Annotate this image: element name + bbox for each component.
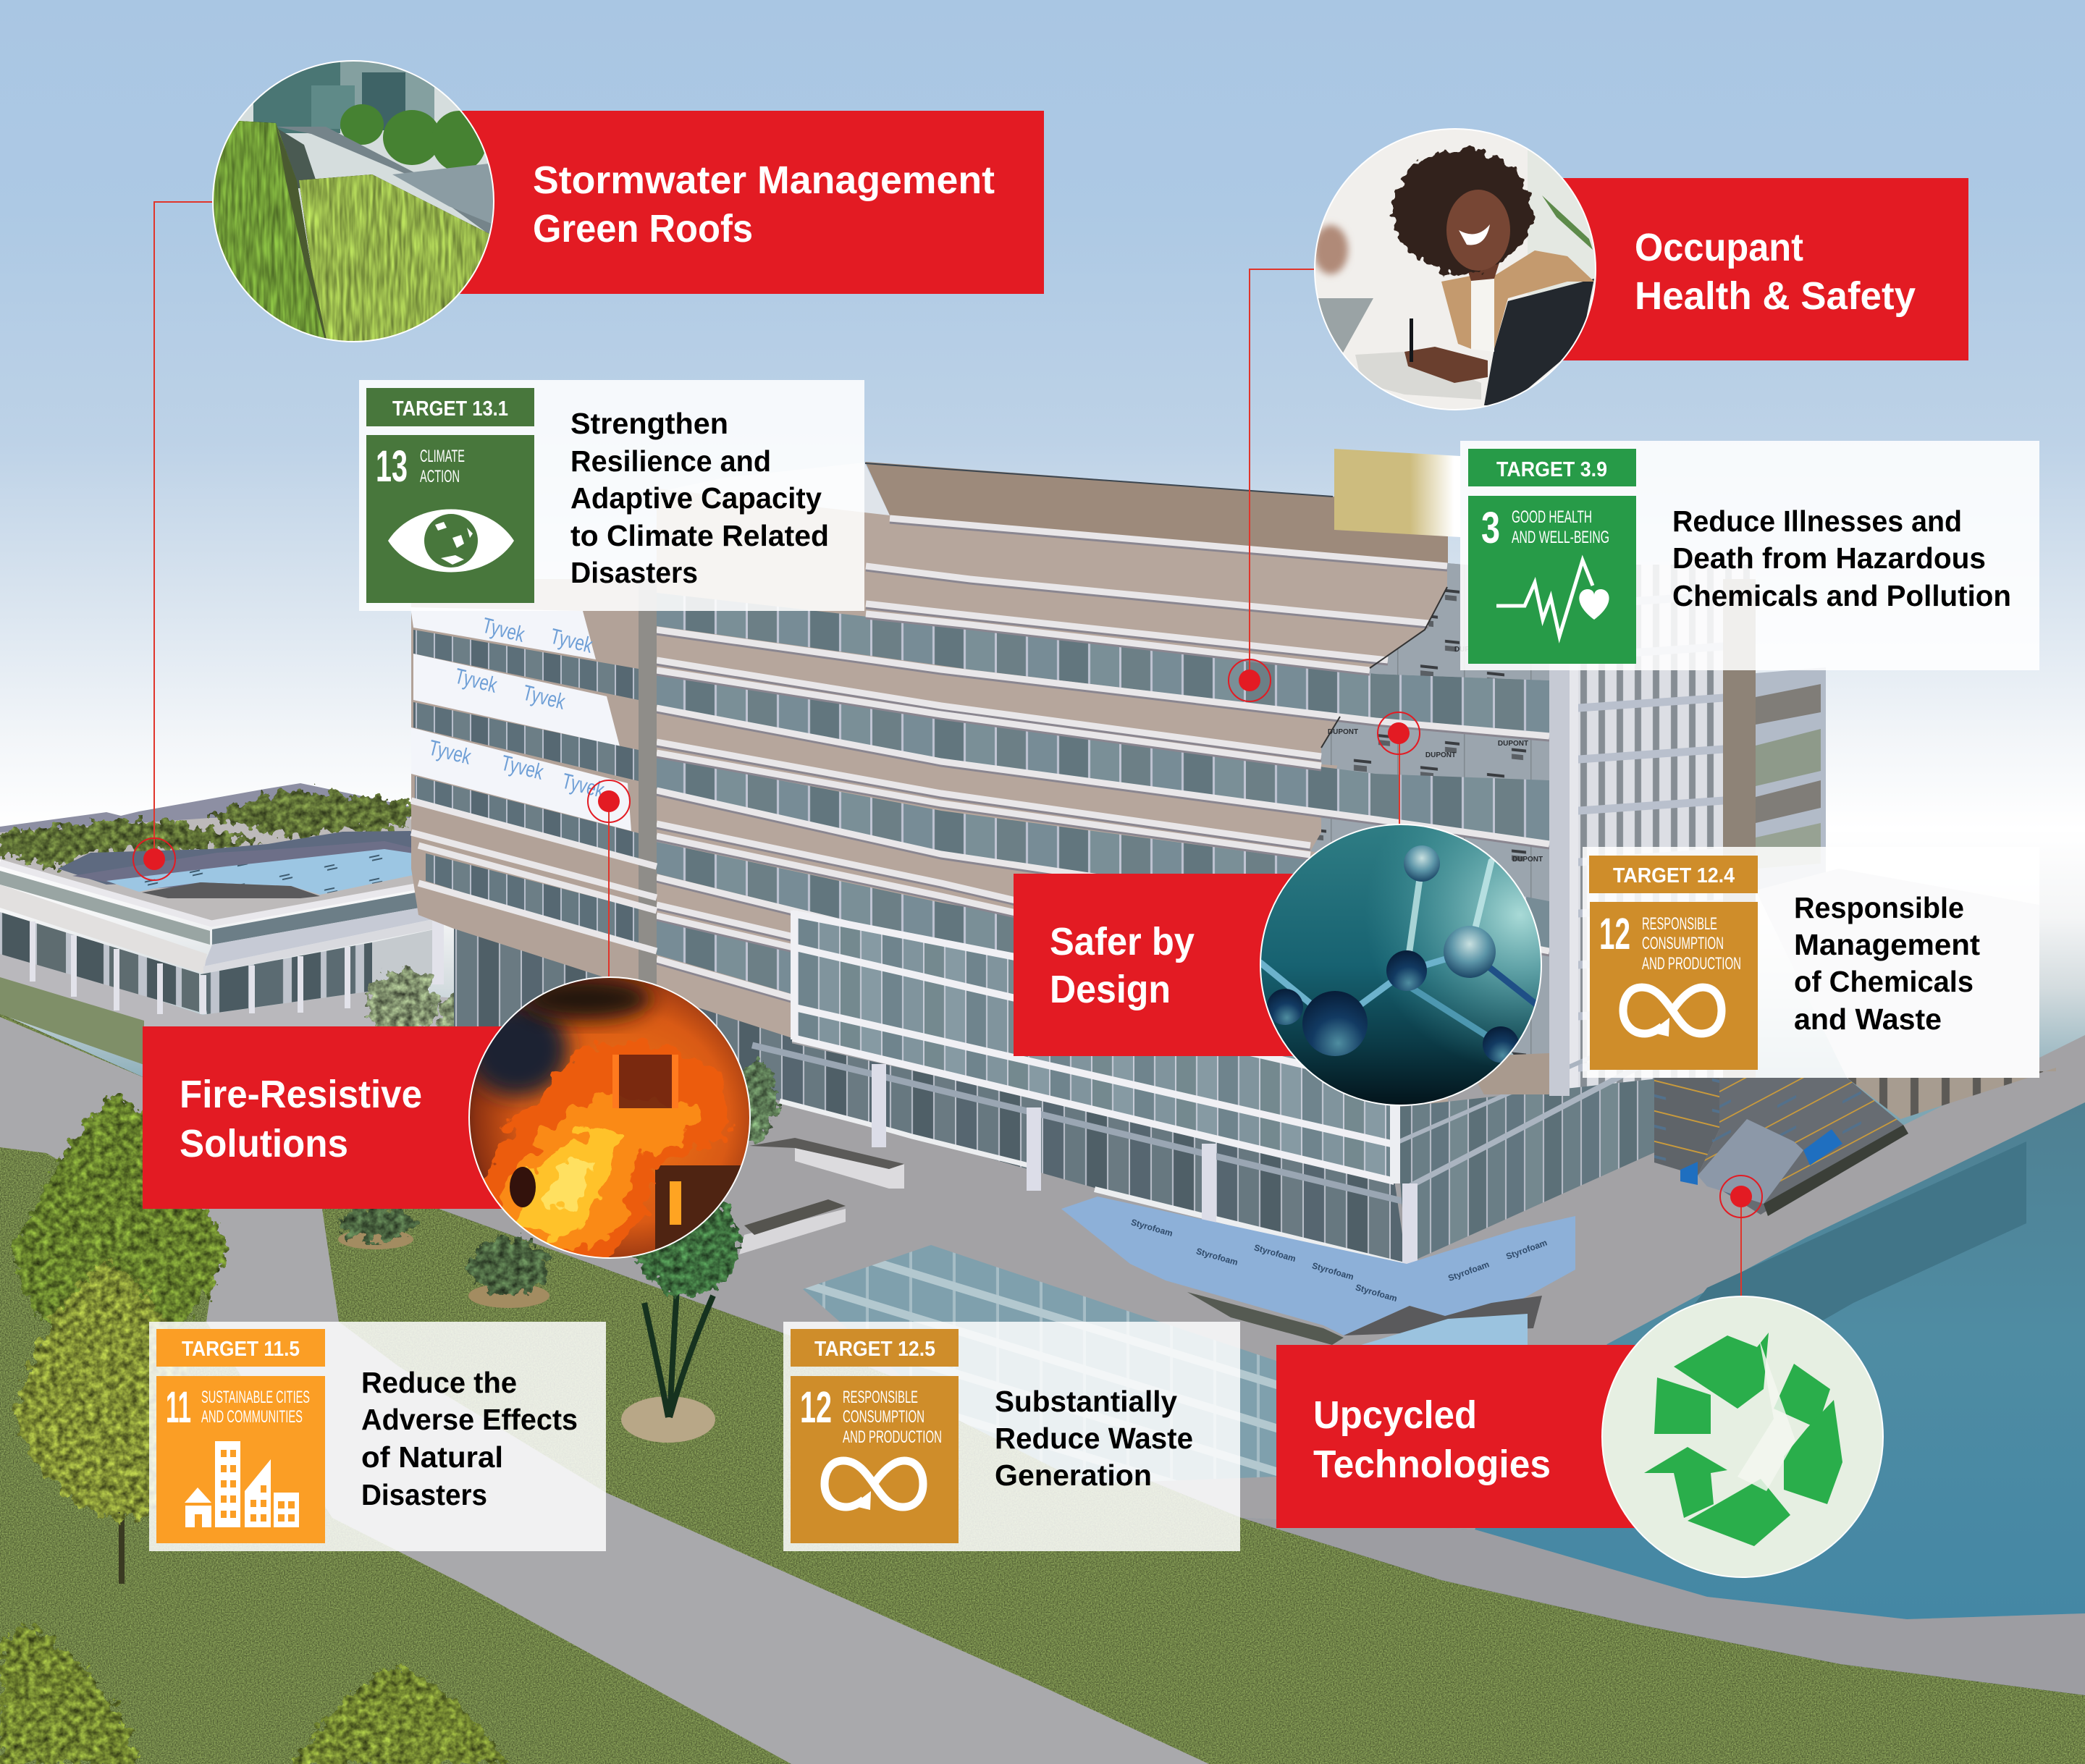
photo: smiling woman at desk (1313, 128, 1600, 410)
text: reduce waste generation: Substantially (995, 1385, 1177, 1418)
photo: molecule (1260, 824, 1543, 1107)
banner: safer by design (1014, 874, 1318, 1056)
photo ring: green roof (213, 61, 494, 342)
sdg tile 3 good health (1468, 496, 1636, 664)
panel: target 11.5 (149, 1322, 606, 1551)
main building: Styrofoam (1253, 1242, 1297, 1264)
roof insulation (106, 849, 424, 895)
icon: infinity loop (1623, 987, 1722, 1037)
banner: safer by design: Design (1050, 968, 1171, 1011)
window band one (657, 593, 1549, 733)
window band two (657, 674, 1549, 841)
foundation cutaway at right corner (1654, 1078, 1908, 1216)
roof structures (657, 463, 890, 515)
banner: occupant health and safety: Health & Safety (1635, 274, 1916, 318)
photo: burning building (467, 977, 753, 1263)
shrubs (338, 1206, 549, 1308)
target label 12.4: TARGET 12.4 (1613, 864, 1735, 887)
banner: occupant health and safety (1528, 178, 1968, 360)
icon: heartbeat (1496, 560, 1609, 636)
main building: Styrofoam (1504, 1238, 1549, 1262)
banner: upcycled technologies (1276, 1345, 1653, 1528)
right tower bay (1549, 565, 1756, 1097)
sdg tile 13 climate action (366, 435, 534, 603)
main building: Styrofoam (1446, 1259, 1491, 1283)
gold rooftop unit (1334, 449, 1460, 537)
banner: upcycled technologies: Technologies (1313, 1443, 1551, 1486)
lawn (0, 1013, 2085, 1764)
window band four (657, 842, 1158, 984)
grounds: lawn, paths, plaza and water (0, 999, 2085, 1764)
left wing: Tyvek (521, 680, 568, 714)
sdg tile 3 good health: AND WELL-BEING (1512, 528, 1609, 547)
hair (1393, 149, 1532, 274)
text: reduce waste generation: Generation (995, 1459, 1152, 1492)
dupont labels (1328, 646, 1543, 864)
text: reduce illnesses (1672, 505, 2011, 612)
pointer: upcycled (1720, 1176, 1762, 1298)
banner: upcycled technologies: Upcycled (1313, 1393, 1477, 1437)
text: responsible management (1794, 891, 1980, 1036)
sdg tile 11 sustainable cities: 11 (166, 1383, 191, 1432)
ledges (657, 518, 1549, 999)
left wing: Tyvek (548, 624, 596, 658)
left wing: Tyvek (499, 751, 547, 785)
text: reduce waste generation: Reduce Waste (995, 1422, 1193, 1455)
text: responsible management: and Waste (1794, 1003, 1942, 1036)
pointer: green roofs (133, 202, 214, 880)
dupont labels: DUPONT (1425, 751, 1456, 759)
left wing: Tyvek (480, 613, 528, 647)
window band three (657, 757, 1549, 948)
centre tree (621, 1194, 740, 1443)
target label 3.9 (1468, 449, 1636, 486)
far brown wing (1847, 1074, 2039, 1119)
target label 12.5 (791, 1329, 959, 1367)
sdg tile 3 good health: 3 (1481, 503, 1500, 552)
photo: green roof (213, 61, 495, 343)
beige front of torn edges (657, 705, 1340, 764)
building reflection in water (1651, 1141, 2026, 1361)
sdg tile 12 responsible consumption: RESPONSIBLE (1642, 914, 1717, 934)
neck and face (1468, 263, 1499, 281)
ground floor glazing (454, 929, 792, 1104)
sdg tile 12 responsible production: CONSUMPTION (843, 1407, 924, 1427)
bottom left tree (0, 1625, 140, 1764)
centre wing beige body (657, 489, 1448, 1107)
bush next to fire circle (736, 1060, 777, 1141)
icon: city (185, 1441, 299, 1527)
planter one (749, 1138, 904, 1189)
text: reduce illnesses: Reduce Illnesses and (1672, 505, 1962, 538)
banner: fire-resistive solutions: Solutions (180, 1122, 348, 1165)
photo: recycling symbol on plastic (1602, 1296, 1884, 1579)
sdg tile 12 responsible consumption (1590, 902, 1758, 1070)
banner: stormwater management green roofs: Green Roofs (533, 207, 753, 250)
dupont labels: DUPONT (1328, 728, 1358, 736)
columns (872, 1064, 1418, 1281)
sdg tile 12 responsible consumption: CONSUMPTION (1642, 934, 1724, 953)
text: reduce adverse effects (361, 1366, 578, 1511)
sdg tile 11 sustainable cities: AND COMMUNITIES (201, 1407, 303, 1427)
target label 3.9: TARGET 3.9 (1496, 458, 1607, 481)
window band five (657, 920, 796, 995)
roof planting (0, 821, 268, 869)
pointer: safer by design (1378, 712, 1420, 826)
sdg tile 12 responsible production (791, 1376, 959, 1543)
photo ring: recycling (1602, 1296, 1883, 1577)
sdg tile 3 good health: GOOD HEALTH (1512, 507, 1592, 527)
low building with green roof (0, 783, 463, 1065)
walking path (0, 1017, 1209, 1764)
icon: infinity loop (825, 1461, 923, 1510)
sdg tile 13 climate action: ACTION (420, 467, 460, 486)
left wing: Tyvek (452, 664, 500, 698)
foundation insulation (1061, 1197, 1575, 1335)
sdg tile 12 responsible production: AND PRODUCTION (843, 1427, 942, 1447)
target label 12.4 (1589, 856, 1758, 893)
pointer: fire resistive (588, 780, 630, 979)
colonnade (30, 915, 444, 1014)
target label 13.1 (366, 388, 534, 426)
photo ring: woman (1315, 129, 1596, 410)
main building: Styrofoam (1195, 1246, 1239, 1267)
banner: fire-resistive solutions: Fire-Resistive (180, 1073, 422, 1116)
roof edge (0, 863, 427, 924)
panel: target 12.4 (1583, 847, 2039, 1078)
planter two (739, 1199, 846, 1254)
text: climate resilience: Strengthen (570, 407, 728, 440)
dupont labels: DUPONT (1498, 740, 1528, 748)
photo ring: molecule (1260, 824, 1541, 1105)
target label 11.5 (156, 1329, 325, 1367)
text: responsible management: of Chemicals (1794, 965, 1974, 998)
sdg tile 12 responsible consumption: AND PRODUCTION (1642, 954, 1741, 974)
banner: occupant health and safety: Occupant (1635, 226, 1803, 269)
text: climate resilience: Adaptive Capacity (570, 481, 822, 515)
sdg tile 12 responsible production: RESPONSIBLE (843, 1388, 918, 1407)
sdg tile 13 climate action: CLIMATE (420, 447, 465, 466)
icon: eye with globe (388, 510, 514, 572)
dupont exposed sheathing (1321, 563, 1549, 1100)
text: climate resilience (570, 407, 829, 589)
text: responsible management: Management (1794, 928, 1980, 961)
projecting glazed box (792, 911, 1394, 1180)
left wing: Tyvek (560, 769, 607, 803)
skylight (803, 1245, 1276, 1484)
text: reduce waste generation (995, 1385, 1193, 1492)
text: climate resilience: to Climate Related (570, 519, 829, 552)
exposed panels between bands (1321, 717, 1549, 780)
target label 12.5: TARGET 12.5 (814, 1338, 935, 1361)
banner: stormwater management green roofs: Stormwater Management (533, 159, 995, 202)
foreground trees (0, 1060, 777, 1764)
text: reduce adverse effects: Disasters (361, 1478, 487, 1511)
torn edge lines (1370, 587, 1447, 668)
left wing (410, 579, 657, 1017)
sdg tile 13 climate action: 13 (376, 442, 408, 491)
text: reduce illnesses: Death from Hazardous (1672, 541, 1986, 575)
dupont labels: DUPONT (1512, 856, 1543, 864)
tyvek wrap (410, 607, 596, 659)
panel: target 12.5 (783, 1322, 1240, 1551)
banner: safer by design: Safer by (1050, 920, 1195, 963)
sdg tile 11 sustainable cities: SUSTAINABLE CITIES (201, 1388, 310, 1407)
main building: Styrofoam (1355, 1282, 1399, 1304)
lower conifer (13, 1259, 206, 1584)
plaza (405, 999, 2085, 1529)
left wing: Tyvek (426, 735, 474, 769)
desk (1355, 352, 1481, 400)
banner: fire-resistive solutions (143, 1026, 519, 1209)
lakeside curb (1242, 1518, 2085, 1695)
text: reduce adverse effects: Adverse Effects (361, 1403, 578, 1436)
roof membrane (58, 831, 427, 885)
text: responsible management: Responsible (1794, 891, 1964, 924)
panel: target 3.9 (1460, 441, 2039, 670)
banner: stormwater management green roofs (434, 111, 1044, 294)
text: climate resilience: Disasters (570, 556, 698, 589)
sdg tile 12 responsible production: 12 (800, 1383, 832, 1432)
text: reduce adverse effects: Reduce the (361, 1366, 517, 1399)
main building: Styrofoam (1130, 1217, 1174, 1238)
target label 11.5: TARGET 11.5 (182, 1338, 300, 1361)
clothing (1484, 279, 1594, 405)
big conifer (13, 1094, 229, 1346)
background trees beside the main building (367, 969, 504, 1038)
panel: target 13.1 (359, 380, 864, 611)
text: reduce illnesses: Chemicals and Pollution (1672, 579, 2011, 612)
sdg tile 11 sustainable cities (156, 1376, 325, 1543)
text: climate resilience: Resilience and (570, 444, 771, 478)
target label 13.1: TARGET 13.1 (392, 397, 508, 421)
main building: Styrofoam (1311, 1260, 1355, 1282)
right ground face (1394, 1079, 1658, 1264)
sdg tile 12 responsible consumption: 12 (1599, 909, 1630, 958)
photo ring: fire (469, 977, 750, 1258)
dupont labels: DUPONT (1454, 646, 1485, 654)
pointer: occupant health (1229, 269, 1316, 701)
ledge shadows (657, 522, 1549, 1003)
light wing behind panel (1756, 869, 2039, 1078)
main building (410, 449, 2056, 1345)
water (1475, 1102, 2085, 1619)
right wing (1756, 667, 1826, 890)
bottom center tree (292, 1665, 505, 1764)
text: reduce adverse effects: of Natural (361, 1440, 503, 1474)
